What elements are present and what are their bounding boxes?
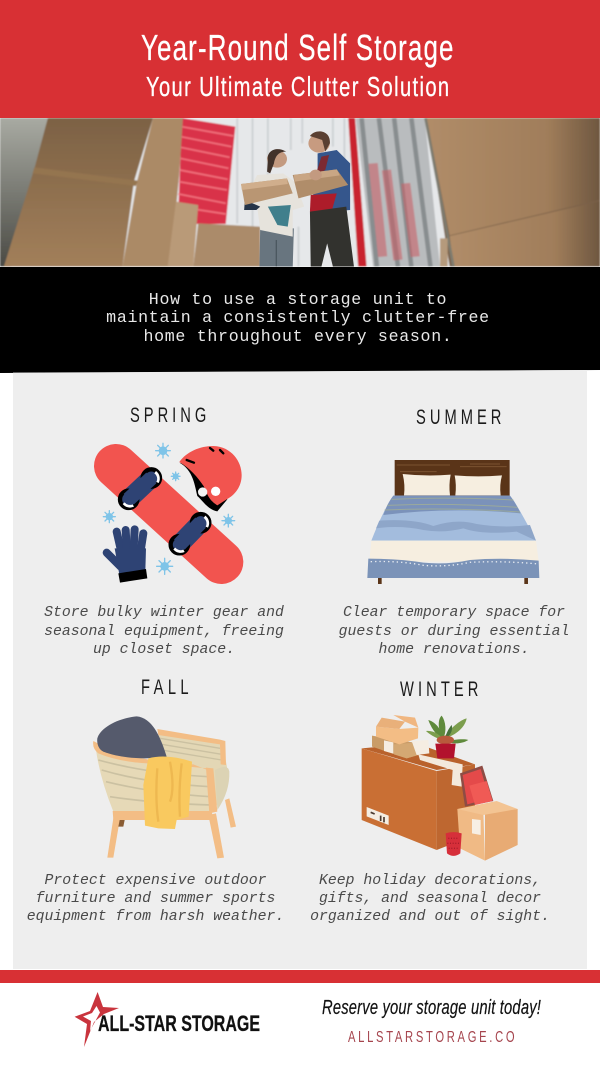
winter text: organized and out of sight. bbox=[310, 909, 550, 925]
fall text: furniture and summer sports bbox=[36, 891, 275, 907]
summer text: guests or during essential bbox=[339, 624, 569, 640]
spring text: seasonal equipment, freeing bbox=[44, 624, 284, 640]
winter text: gifts, and seasonal decor bbox=[319, 891, 541, 907]
fall text bbox=[27, 873, 284, 925]
intro band bbox=[0, 267, 600, 373]
summer heading: SUMMER bbox=[416, 405, 501, 429]
icon: stacked moving boxes with plant bbox=[362, 715, 518, 861]
icon: snowboard, helmet and glove bbox=[103, 443, 242, 583]
title: Year-Round Self Storage bbox=[141, 28, 453, 68]
spring text: Store bulky winter gear and bbox=[44, 605, 284, 621]
winter text bbox=[310, 873, 550, 925]
photo: couple carrying boxes in a storage unit bbox=[0, 118, 600, 267]
summer text: home renovations. bbox=[379, 642, 529, 658]
winter text: Keep holiday decorations, bbox=[319, 873, 541, 889]
spring text: up closet space. bbox=[93, 642, 235, 658]
intro text: How to use a storage unit to bbox=[149, 290, 447, 309]
logo wordmark: ALL-STAR STORAGE bbox=[98, 1011, 260, 1036]
fall text: equipment from harsh weather. bbox=[27, 909, 284, 925]
winter heading: WINTER bbox=[400, 677, 478, 701]
header band bbox=[0, 0, 600, 118]
icon: bed bbox=[367, 460, 539, 584]
logo: All-Star Storage bbox=[75, 992, 260, 1047]
fall heading: FALL bbox=[141, 675, 189, 699]
spring text bbox=[44, 605, 284, 658]
fall text: Protect expensive outdoor bbox=[44, 873, 267, 889]
spring heading: SPRING bbox=[130, 403, 206, 427]
summer text bbox=[339, 605, 569, 658]
summer text: Clear temporary space for bbox=[343, 605, 565, 621]
website: ALLSTARSTORAGE.CO bbox=[348, 1027, 515, 1045]
icon: star bbox=[75, 992, 119, 1047]
icon: armchair with cushion and blanket bbox=[93, 716, 236, 858]
intro text: maintain a consistently clutter-free bbox=[106, 308, 490, 327]
seasons panel bbox=[13, 370, 587, 969]
call to action: Reserve your storage unit today! bbox=[322, 996, 541, 1019]
subtitle: Your Ultimate Clutter Solution bbox=[146, 72, 449, 103]
intro text: home throughout every season. bbox=[143, 327, 453, 346]
footer red bar bbox=[0, 970, 600, 983]
intro text bbox=[106, 290, 490, 346]
